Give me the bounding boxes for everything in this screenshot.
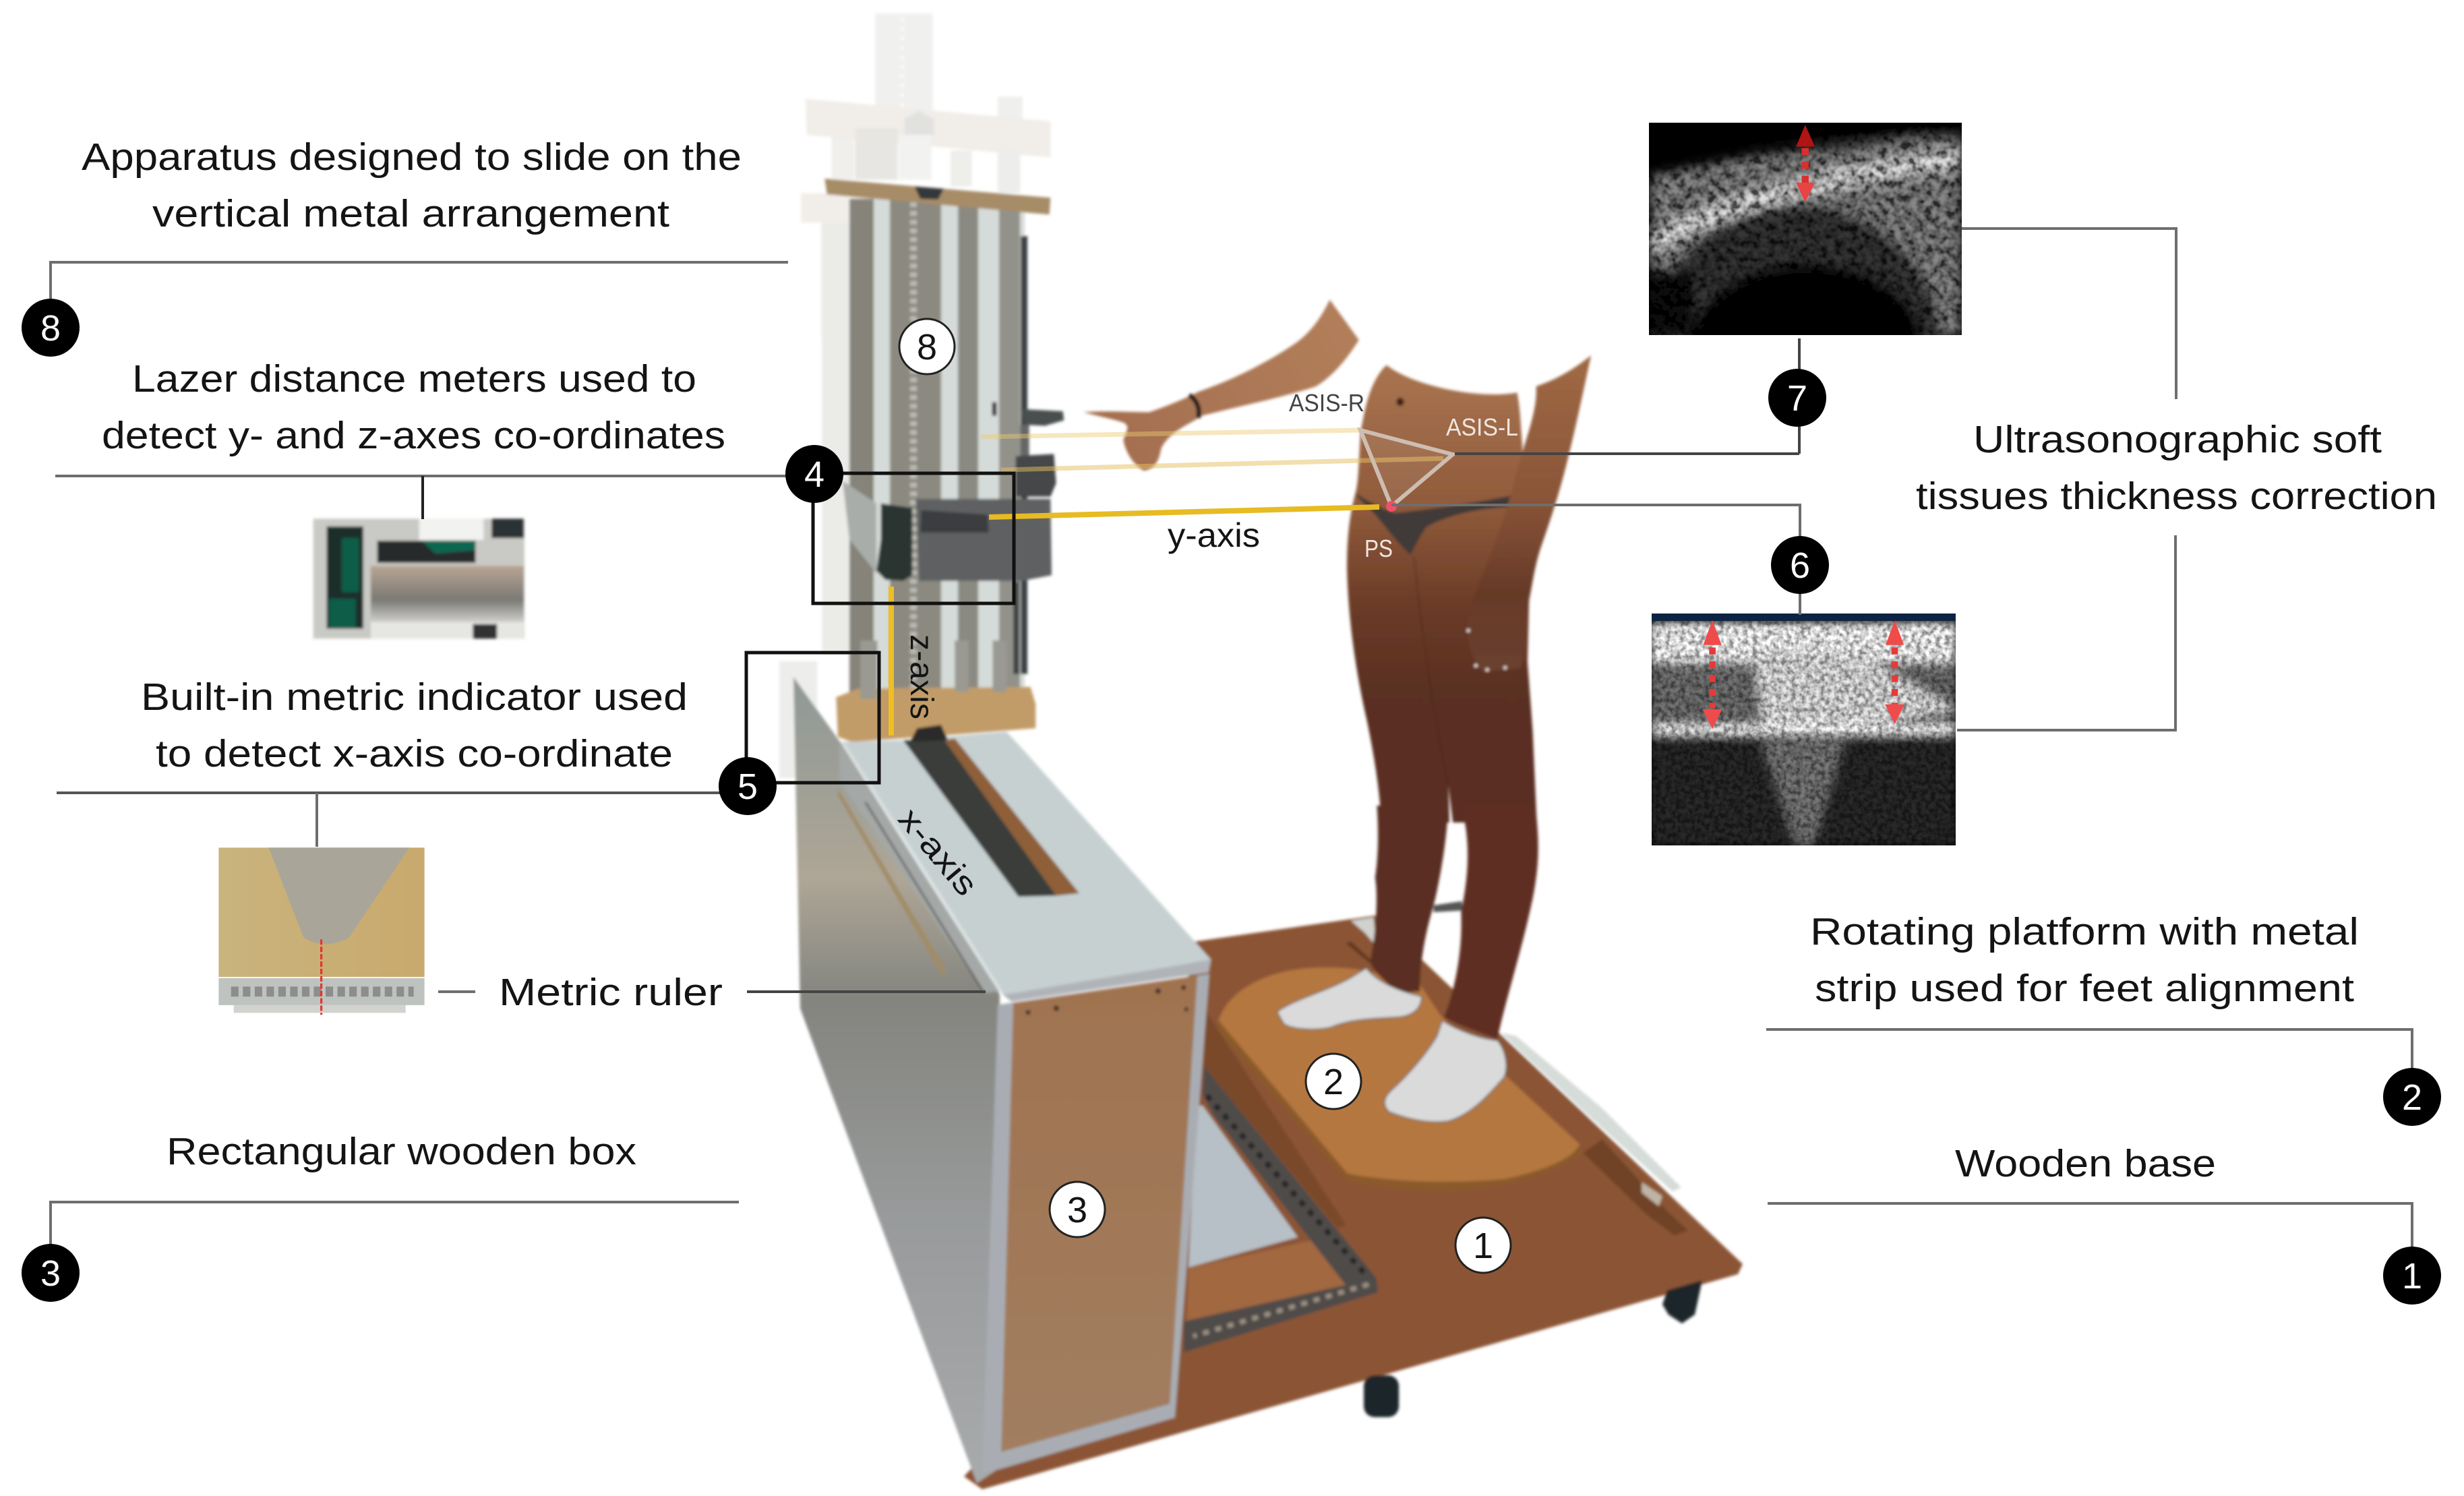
- landmark: ASIS-R: ASIS-R: [1289, 389, 1364, 417]
- heading: metric indicator: [141, 676, 688, 775]
- ruler: [218, 978, 425, 1005]
- heading: laser meters: detect y- and z-axes co-ordinates: [102, 414, 725, 457]
- y-axis laser line: [989, 507, 1379, 517]
- black badges: [22, 299, 2441, 1305]
- badge 3: [22, 1244, 80, 1302]
- badge white 2: [1306, 1054, 1361, 1109]
- white badges: [899, 319, 1511, 1273]
- box front panel: [982, 974, 1209, 1472]
- wooden crossbar: [824, 179, 1050, 214]
- axis label: x: x-axis: [891, 802, 984, 903]
- badge 8: 8: [40, 308, 61, 349]
- heading: apparatus: Apparatus designed to slide on the: [82, 136, 742, 179]
- badge white 1: [1455, 1218, 1511, 1273]
- badge white 2: 2: [1323, 1062, 1344, 1102]
- landmarks triangle and laser lines: [981, 430, 1453, 512]
- socks: [1277, 968, 1506, 1122]
- callout box 5: [746, 653, 879, 783]
- badge white 8: 8: [917, 327, 937, 367]
- base legs: [1364, 1280, 1702, 1417]
- label: ultrasonographic: [1916, 418, 2437, 518]
- label: rotating platform: strip used for feet alignment: [1815, 967, 2354, 1010]
- heading: metric indicator: to detect x-axis co-ordinate: [156, 732, 673, 775]
- photo: measuring apparatus and subject: [779, 13, 1743, 1489]
- ultrasound image 7: [1649, 123, 1962, 491]
- label: rotating platform: [1810, 910, 2359, 1010]
- leader lines: [51, 229, 2412, 1251]
- thumbnail: metric indicator: [218, 847, 425, 1015]
- label: metric ruler: Metric ruler: [499, 971, 723, 1014]
- badge white 3: [1050, 1182, 1105, 1237]
- person: [1084, 299, 1591, 822]
- badge 7: 7: [1787, 378, 1807, 419]
- badge white 8: [899, 319, 955, 374]
- vertical metal arrangement: [822, 199, 1027, 698]
- badge 6: 6: [1790, 545, 1810, 586]
- badge 5: 5: [738, 767, 758, 807]
- badge 1: 1: [2402, 1256, 2422, 1296]
- badge 1: [2383, 1247, 2441, 1305]
- badge 4: [785, 445, 843, 503]
- heading: laser meters: Lazer distance meters used to: [132, 357, 696, 400]
- label: rotating platform: Rotating platform with metal: [1810, 910, 2359, 953]
- heading: apparatus: [82, 136, 742, 235]
- red indicator line: [320, 939, 323, 1015]
- cavity under the box: [1184, 1011, 1378, 1352]
- label: ultrasonographic: tissues thickness correction: [1916, 475, 2437, 518]
- z-axis laser line: [889, 587, 894, 736]
- laser carriage: [843, 402, 1064, 674]
- badge 2: [2383, 1068, 2441, 1126]
- label: ultrasonographic: Ultrasonographic soft: [1973, 418, 2382, 461]
- badge 6: [1771, 536, 1829, 594]
- landmark: PS: PS: [1364, 535, 1393, 562]
- badge 2: 2: [2402, 1077, 2422, 1118]
- badge 5: [719, 757, 777, 815]
- rotating platform and metal strip: [1219, 901, 1688, 1236]
- red arrows 7: [1796, 125, 1815, 202]
- label: wooden base: Wooden base: [1955, 1142, 2216, 1185]
- ultrasound image 6: [1652, 614, 1956, 845]
- label: wooden box: Rectangular wooden box: [167, 1130, 636, 1173]
- badge 8: [22, 299, 80, 357]
- axis label: y: y-axis: [1168, 516, 1260, 554]
- badge white 1: 1: [1473, 1226, 1493, 1266]
- landmark: ASIS-L: ASIS-L: [1446, 413, 1518, 441]
- torso and thighs: [1347, 365, 1537, 822]
- red arrows 6: [1703, 620, 1904, 729]
- box side: [793, 677, 1000, 1483]
- rectangular box: [793, 677, 1211, 1483]
- callout box 4: [813, 473, 1014, 603]
- heading: metric indicator: Built-in metric indicator used: [141, 676, 688, 719]
- wristband: [1189, 395, 1199, 418]
- box top detail: [838, 725, 1211, 1002]
- right lower leg: [1444, 806, 1538, 1040]
- pointing arm: [1084, 299, 1359, 471]
- axis label: z: z-axis: [903, 634, 939, 719]
- heading: apparatus: vertical metal arrangement: [152, 192, 669, 235]
- badge 3: 3: [40, 1253, 61, 1294]
- thumbnail: laser distance meters: [313, 518, 524, 638]
- underwear: [1356, 493, 1510, 555]
- heading: laser meters: [102, 357, 725, 457]
- wooden base: [964, 916, 1743, 1489]
- wooden base block of slider: [779, 640, 1035, 778]
- badge white 3: 3: [1067, 1190, 1087, 1230]
- faded upper position of the slider: [801, 13, 1050, 337]
- badge 4: 4: [804, 454, 824, 495]
- hanging arm: [1468, 355, 1591, 672]
- left lower leg: [1370, 806, 1448, 993]
- badge 7: [1768, 369, 1826, 427]
